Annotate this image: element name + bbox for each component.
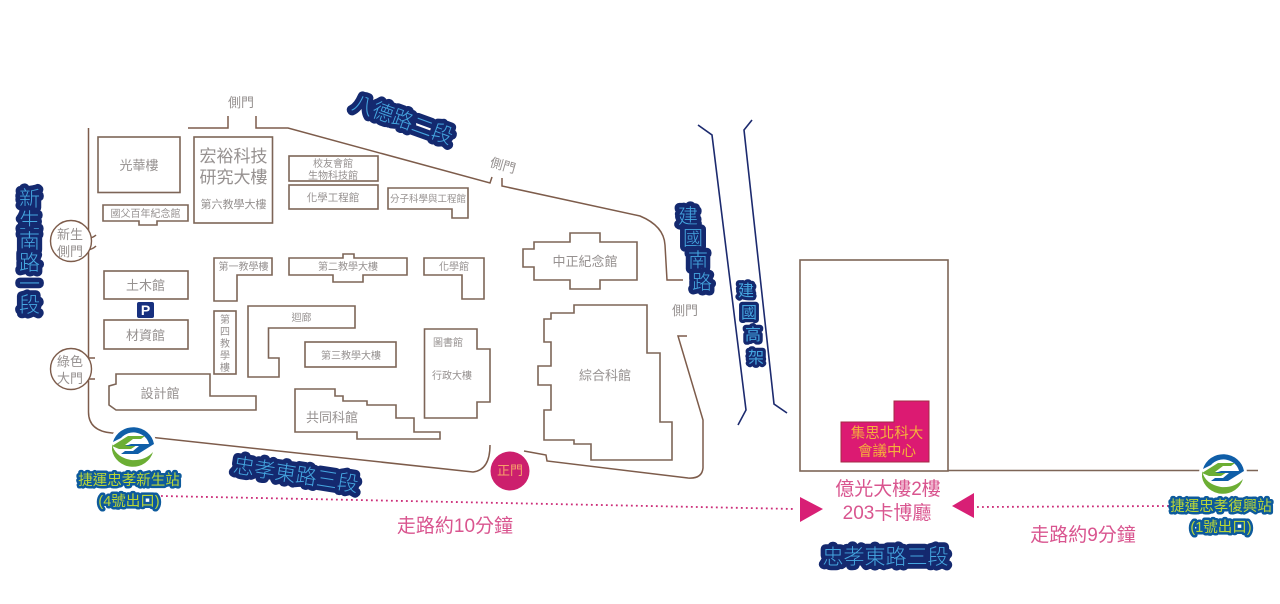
icon: parking: [137, 302, 154, 318]
building: Common sciences: 共同科館: [306, 410, 358, 425]
building: Second teaching: [289, 254, 407, 282]
dotted route from Zhongxiao Fuxing: [977, 506, 1170, 507]
gate: green gate: 綠色: [57, 354, 83, 369]
building: Materials: 材資館: [126, 328, 165, 343]
gate label: north-east side gate: 側門: [488, 155, 517, 176]
building: General sciences: [538, 305, 672, 460]
arrow: right: [800, 497, 823, 522]
building: General sciences: 綜合科館: [579, 368, 631, 383]
building: Hongyu research building: 研究大樓: [200, 168, 268, 187]
gate: Xinsheng side gate: [50, 220, 92, 262]
road label: Bade Rd: 八德路二段: [349, 92, 456, 149]
building: Library and administration: 行政大樓: [432, 369, 472, 382]
elevated highway lines: [698, 120, 787, 425]
main gate: [490, 452, 530, 490]
building: Guanghua: 光華樓: [119, 158, 159, 173]
building: Hongyu research building: [194, 137, 272, 223]
main gate: 正門: [497, 463, 523, 478]
building: Fourth teaching: 第: [220, 313, 230, 326]
gate: Xinsheng side gate: 新生: [57, 227, 83, 242]
building: Molecular science: 分子科學與工程館: [390, 193, 466, 205]
building: Fourth teaching: 四: [220, 327, 230, 338]
building: Corridor: 迴廊: [292, 311, 312, 324]
building: Materials: [104, 320, 188, 349]
station label: Zhongxiao Fuxing: 捷運忠孝復興站: [1170, 497, 1272, 515]
building: Chiang Kai-shek memorial hall: [523, 233, 637, 289]
road label: Xinsheng S. Rd: 新生南路一段: [19, 188, 40, 317]
gate: green gate: [50, 348, 92, 390]
building: Library and administration: [424, 329, 490, 418]
building: Sun Yat-sen centennial hall: 國父百年紀念館: [110, 207, 180, 220]
building: Design: 設計館: [140, 386, 180, 401]
gate: green gate: 大門: [57, 371, 83, 386]
icon: parking: P: [141, 302, 150, 318]
building: Design: [109, 374, 256, 410]
building: Corridor: [248, 306, 355, 377]
building: Chemistry: 化學館: [439, 260, 469, 273]
building: Fourth teaching: 學: [220, 349, 230, 362]
building: Chemistry: [424, 258, 484, 299]
building: Hongyu research building: 第六教學大樓: [200, 197, 266, 211]
building: Fourth teaching: 教: [220, 337, 230, 350]
building: First teaching: [214, 258, 272, 301]
building: Hongyu research building: 宏裕科技: [200, 147, 268, 166]
icon: metro logo, Zhongxiao Fuxing: [1199, 450, 1247, 498]
building: Third teaching: 第三教學大樓: [321, 349, 381, 362]
building: Alumni and biotech: 生物科技館: [308, 169, 358, 182]
venue building outline: [800, 260, 1258, 471]
walking time 9 minutes: 走路約9分鐘: [1030, 524, 1136, 546]
building: Civil engineering: [104, 271, 188, 299]
building: Third teaching: [305, 342, 396, 367]
building: Alumni and biotech: 校友會館: [313, 157, 353, 170]
gate label: top side gate: 側門: [228, 95, 254, 110]
venue floor and hall text: 203卡博廳: [843, 502, 931, 524]
arrow: left: [952, 493, 974, 518]
road label: Jianguo S. Rd: 建國南路: [678, 205, 712, 294]
building: Fourth teaching: [214, 311, 236, 374]
building: First teaching: 第一教學樓: [218, 260, 268, 273]
venue floor and hall text: 億光大樓2樓: [835, 478, 941, 500]
building: Chiang Kai-shek memorial hall: 中正紀念館: [552, 254, 618, 269]
building: Guanghua: [98, 137, 180, 192]
station label: Zhongxiao Xinsheng: (4號出口): [98, 493, 160, 510]
dotted route from Zhongxiao Xinsheng: [161, 496, 795, 509]
building: Chemical engineering: 化學工程館: [307, 191, 359, 204]
campus boundary roads: [88, 116, 703, 478]
icon: metro logo, Zhongxiao Xinsheng: [109, 423, 157, 471]
building: Civil engineering: 土木館: [126, 278, 165, 293]
road label: Zhongxiao E. Rd, venue: 忠孝東路三段: [822, 546, 948, 569]
walking time 10 minutes: 走路約10分鐘: [397, 515, 513, 537]
building: Chemical engineering: [289, 185, 378, 209]
road label: Jianguo viaduct: 建國高架: [738, 282, 764, 367]
building: Common sciences: [295, 389, 440, 439]
building: Fourth teaching: 樓: [220, 361, 230, 374]
building: Library and administration: 圖書館: [433, 336, 463, 349]
venue: TICC Taipei Tech conference centre: 集思北科大: [851, 425, 923, 442]
station label: Zhongxiao Xinsheng: 捷運忠孝新生站: [78, 472, 180, 489]
building: Second teaching: 第二教學大樓: [318, 260, 378, 273]
building: Sun Yat-sen centennial hall: [103, 205, 188, 225]
gate label: east side gate: 側門: [672, 303, 698, 318]
building: Molecular science: [388, 188, 468, 218]
venue: TICC Taipei Tech conference centre: 會議中心: [858, 442, 916, 460]
venue floor and hall text: [835, 478, 941, 524]
station label: Zhongxiao Fuxing: [1170, 497, 1272, 536]
road label: Zhongxiao E. Rd, campus: 忠孝東路三段: [232, 454, 360, 497]
station label: Zhongxiao Fuxing: (1號出口): [1190, 519, 1252, 536]
venue: TICC Taipei Tech conference centre: [841, 401, 929, 462]
station label: Zhongxiao Xinsheng: [78, 472, 180, 510]
gate: Xinsheng side gate: 側門: [57, 244, 83, 259]
building: Alumni and biotech: [289, 156, 378, 182]
